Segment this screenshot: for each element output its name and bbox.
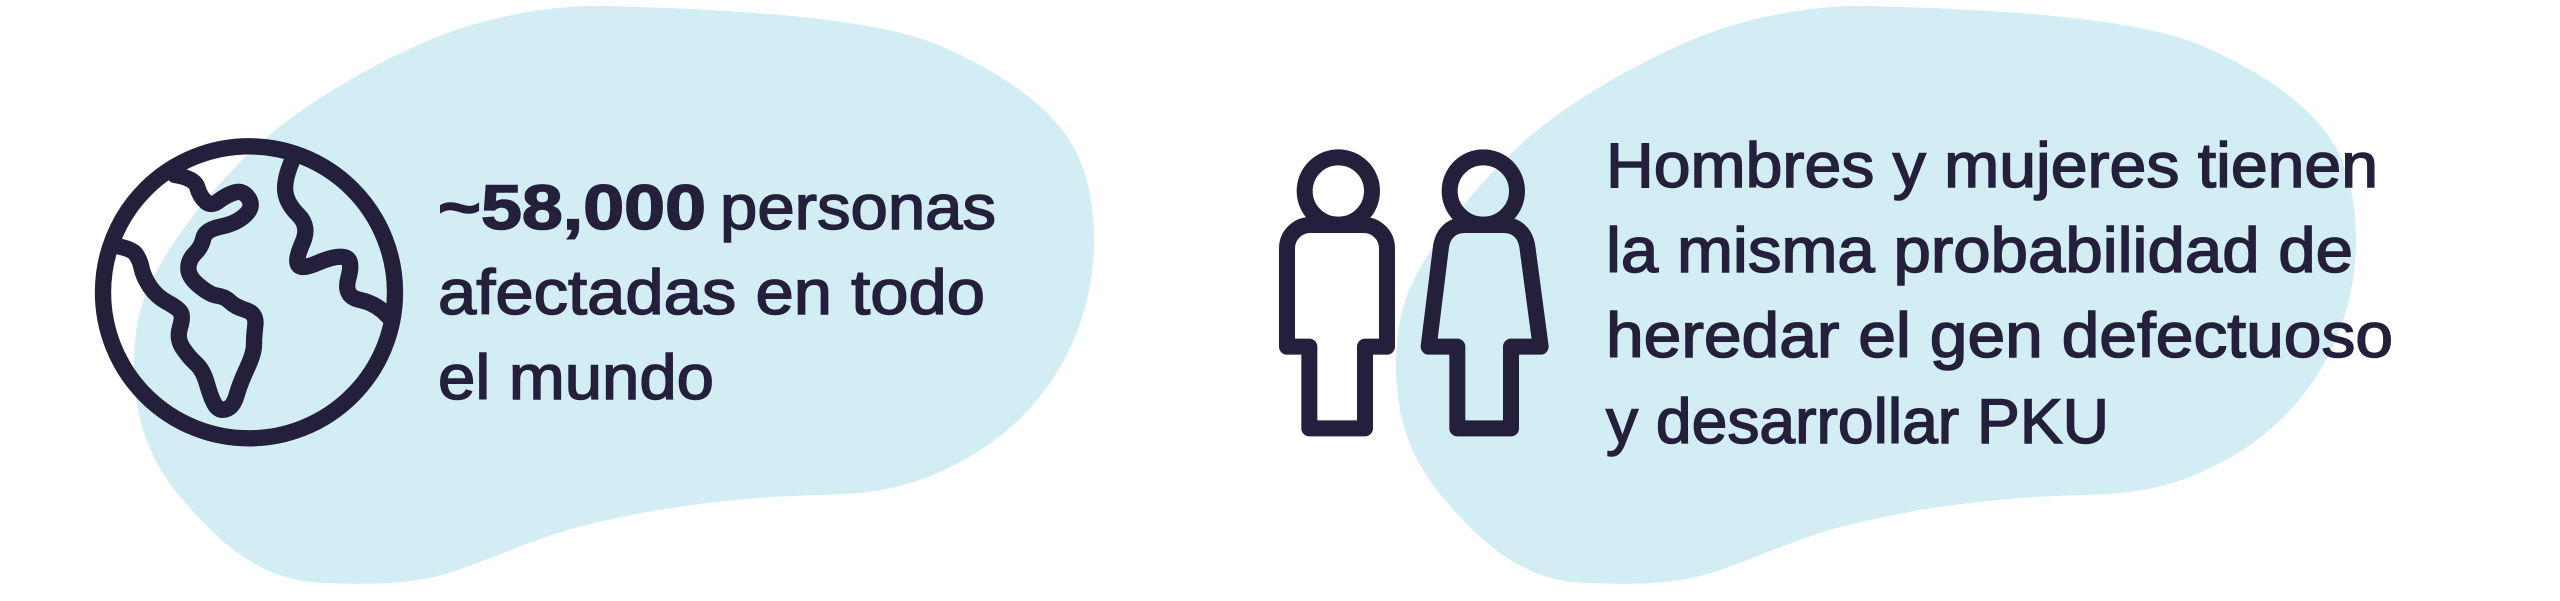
text: right statement: la misma probabilidad de (1606, 216, 2353, 286)
text: left statistic: ~58,000 (438, 173, 706, 243)
text: left statistic: personas (720, 173, 996, 243)
icon: man and woman (1287, 157, 1541, 428)
blob: right background (1396, 6, 2356, 584)
blob: left background (134, 6, 1094, 584)
text: left statistic: afectadas en todo (438, 258, 985, 328)
text: left statistic (438, 173, 996, 413)
text: left statistic: el mundo (438, 343, 714, 413)
text: right statement: Hombres y mujeres tienen (1606, 131, 2378, 201)
icon: man (1287, 157, 1387, 428)
text: right statement (1606, 131, 2393, 457)
text: right statement: heredar el gen defectuoso (1606, 301, 2393, 371)
icon: woman (1429, 157, 1541, 428)
text: right statement: y desarrollar PKU (1606, 387, 2109, 457)
icon: globe (103, 146, 395, 438)
